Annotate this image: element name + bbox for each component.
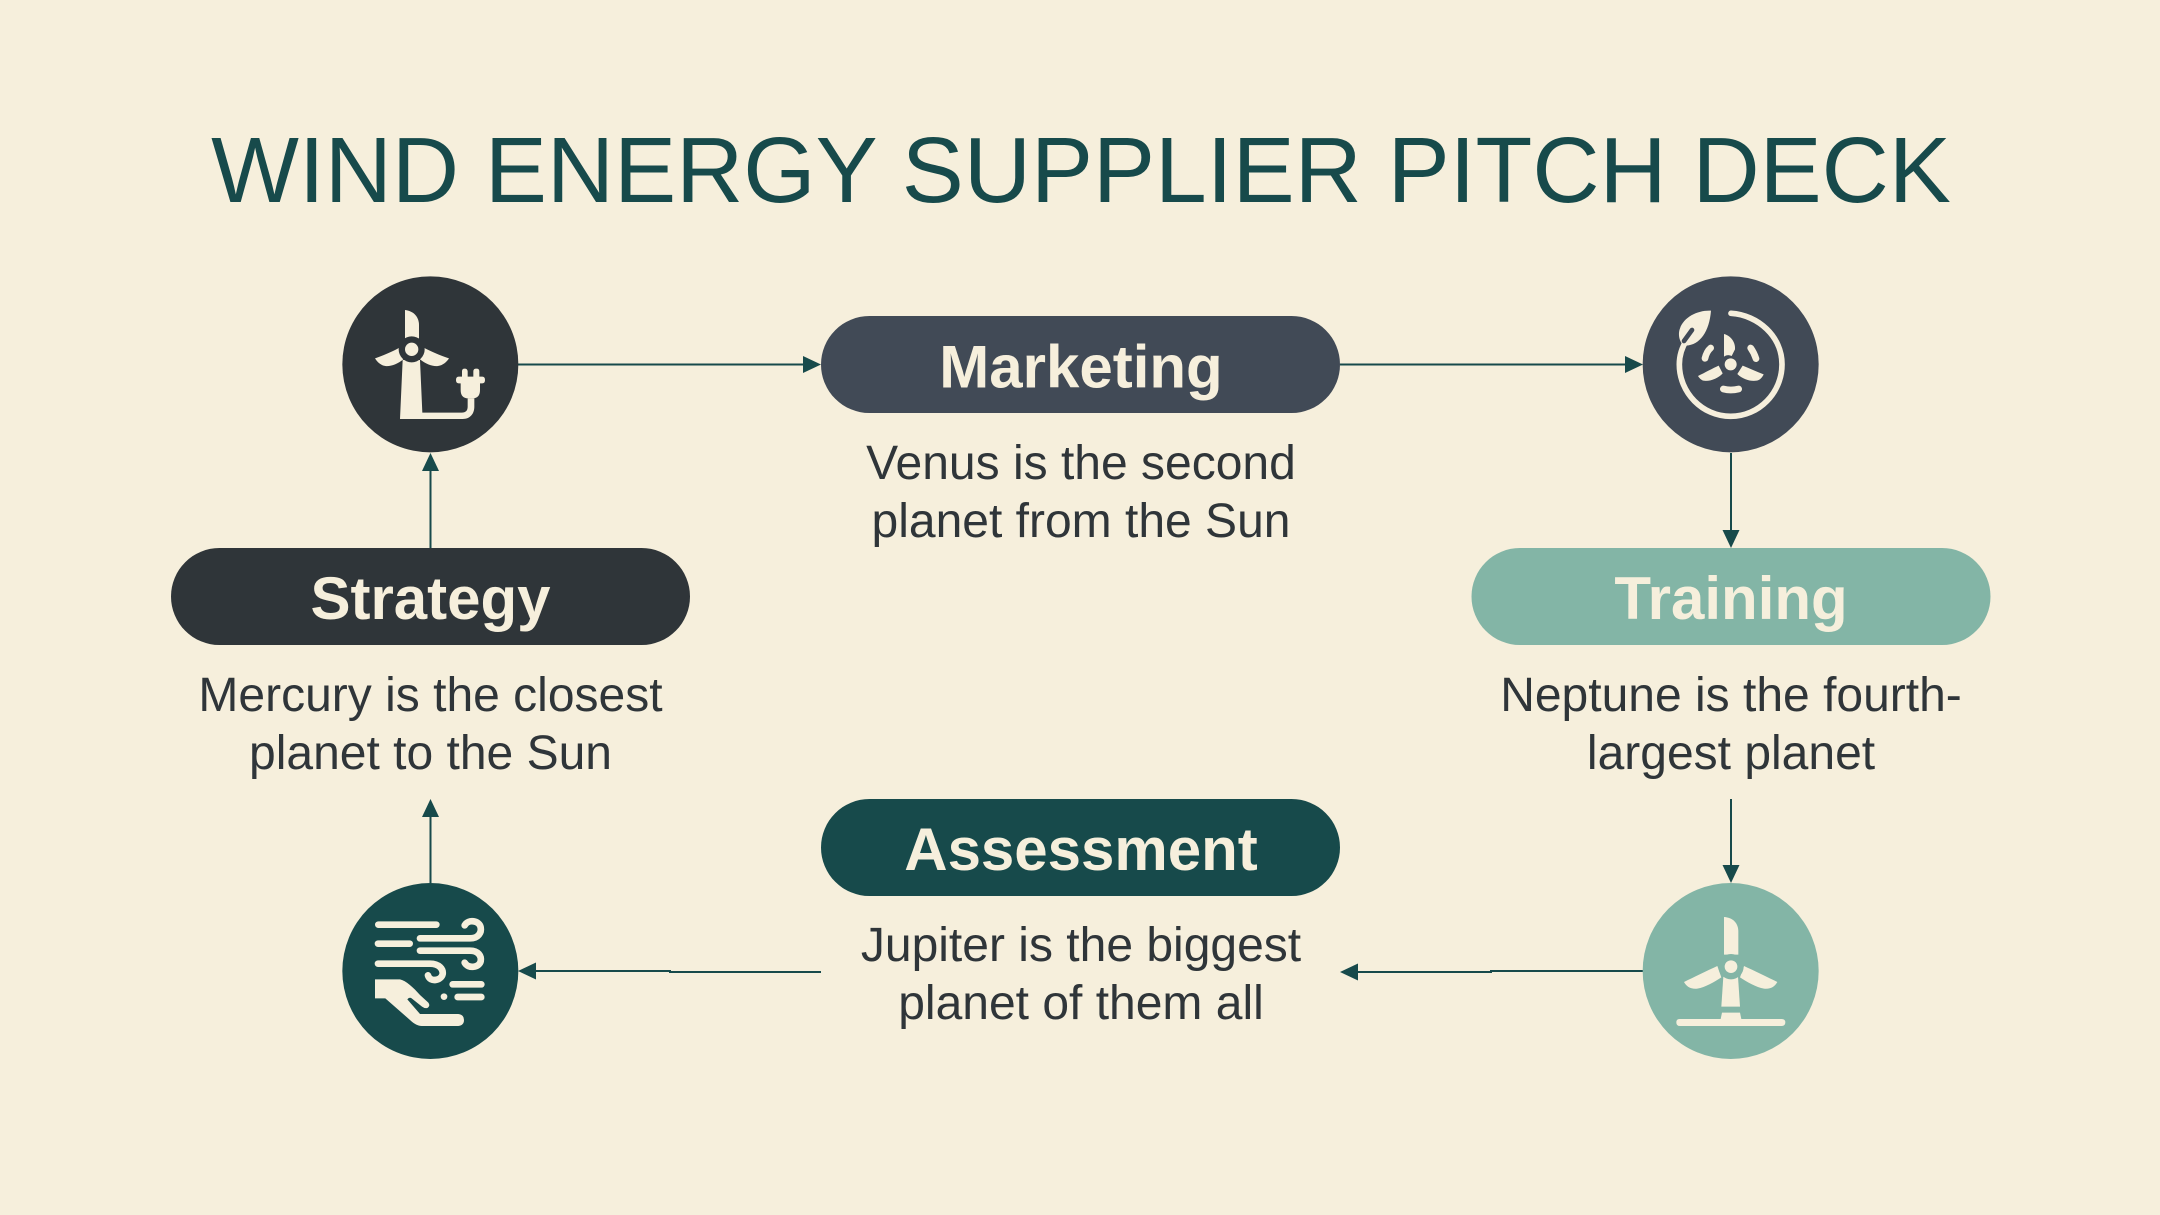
arrow: marketing to training icon bbox=[1340, 356, 1643, 373]
marketing pill bbox=[821, 316, 1340, 413]
title: WIND ENERGY SUPPLIER PITCH DECK bbox=[211, 118, 1951, 222]
assessment text: Jupiter is the biggest bbox=[861, 919, 1301, 972]
marketing heading: Marketing bbox=[939, 334, 1223, 400]
icon: turbine with plug bbox=[342, 276, 518, 452]
strategy heading: Strategy bbox=[310, 565, 551, 632]
icon: wind turbine bbox=[1643, 883, 1819, 1059]
arrow: assessment to wind hand icon bbox=[518, 962, 821, 980]
assessment text: planet of them all bbox=[898, 977, 1264, 1030]
panel: strategy bbox=[171, 548, 690, 780]
marketing text: Venus is the second bbox=[866, 437, 1296, 490]
panel: assessment bbox=[821, 799, 1340, 1030]
panel: training bbox=[1472, 548, 1990, 780]
panel: marketing bbox=[821, 316, 1340, 548]
arrow: strategy pill to plug turbine icon bbox=[422, 453, 439, 548]
icon: turbine in leaf circle bbox=[1643, 276, 1819, 452]
arrow: wind turbine icon to assessment bbox=[1340, 964, 1643, 980]
icon: wind over hand bbox=[342, 883, 518, 1059]
assessment pill bbox=[821, 799, 1340, 896]
strategy text: Mercury is the closest bbox=[198, 669, 663, 722]
training text: largest planet bbox=[1587, 727, 1875, 780]
assessment heading: Assessment bbox=[904, 816, 1258, 883]
training text: Neptune is the fourth- bbox=[1500, 669, 1962, 722]
arrow: training text to wind turbine icon bbox=[1722, 799, 1740, 883]
strategy pill bbox=[171, 548, 690, 645]
training heading: Training bbox=[1614, 565, 1848, 632]
arrow: training icon to training pill bbox=[1722, 453, 1740, 548]
arrow: strategy icon to marketing bbox=[518, 356, 821, 373]
arrow: wind hand icon to strategy text bbox=[422, 799, 439, 883]
training pill bbox=[1472, 548, 1990, 645]
strategy text: planet to the Sun bbox=[249, 727, 612, 780]
marketing text: planet from the Sun bbox=[872, 495, 1290, 548]
